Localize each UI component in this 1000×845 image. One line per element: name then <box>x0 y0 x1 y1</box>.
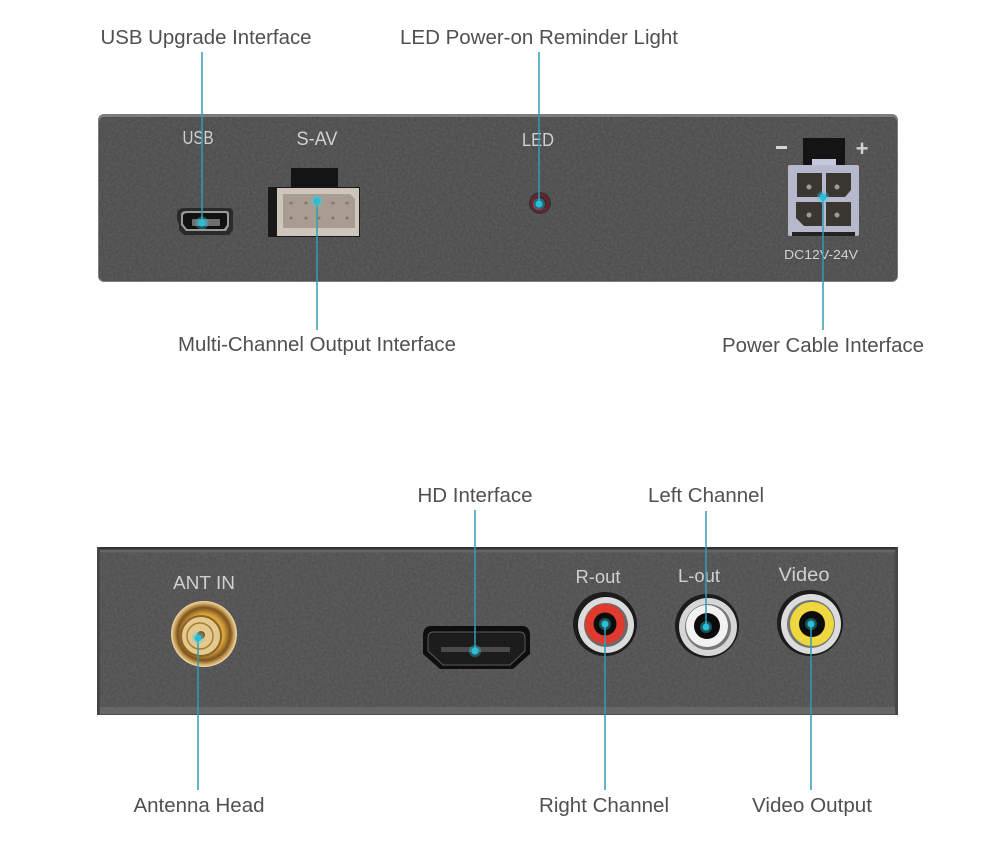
callout: Antenna Head <box>134 632 264 817</box>
printed label: voltage: DC12V-24V <box>784 248 859 262</box>
callout: Antenna Head: Antenna Head <box>134 795 264 817</box>
printed label: Video: Video <box>778 565 830 586</box>
callout: Left Channel <box>648 485 764 633</box>
printed label: L-out: L-out <box>678 566 720 586</box>
printed label: S-AV: S-AV <box>296 129 338 150</box>
panel: bottom device face <box>97 547 898 715</box>
callout: Multi-Channel Output Interface: Multi-Channel Output Interface <box>178 334 456 356</box>
callout: USB Upgrade Interface: USB Upgrade Interface <box>100 27 312 49</box>
callout: Video Output <box>752 618 872 817</box>
callout: Multi-Channel Output Interface <box>178 195 456 356</box>
icon: HDMI port <box>423 626 530 669</box>
callout: HD Interface: HD Interface <box>418 485 532 507</box>
callout: HD Interface <box>418 485 532 657</box>
callout: USB Upgrade Interface <box>100 27 312 230</box>
callout: Power Cable Interface <box>722 191 924 357</box>
printed label: R-out: R-out <box>576 567 620 587</box>
callout: Power Cable Interface: Power Cable Interface <box>722 335 924 357</box>
printed label: LED: LED <box>522 130 554 150</box>
printed label: ANT IN: ANT IN <box>173 572 235 593</box>
callout: Video Output: Video Output <box>752 795 872 817</box>
icon: mini USB port <box>177 208 233 235</box>
printed label: minus <box>776 146 787 149</box>
icon: gold SMA antenna connector <box>171 601 237 667</box>
icon: white RCA jack <box>675 594 739 658</box>
panel: top device face <box>98 114 898 282</box>
icon: LED indicator <box>529 192 551 214</box>
callout: LED Power-on Reminder Light: LED Power-on Reminder Light <box>400 27 678 49</box>
icon: power connector <box>788 138 859 236</box>
callout: Right Channel <box>539 618 669 817</box>
icon: yellow RCA jack <box>777 590 843 656</box>
callout: LED Power-on Reminder Light <box>400 27 678 210</box>
callout: Left Channel: Left Channel <box>648 485 764 507</box>
icon: red RCA jack <box>573 592 637 656</box>
printed label: plus: + <box>856 136 868 161</box>
icon: S-AV multi-pin connector <box>268 168 360 237</box>
callout: Right Channel: Right Channel <box>539 795 669 817</box>
printed label: USB: USB <box>182 128 214 148</box>
